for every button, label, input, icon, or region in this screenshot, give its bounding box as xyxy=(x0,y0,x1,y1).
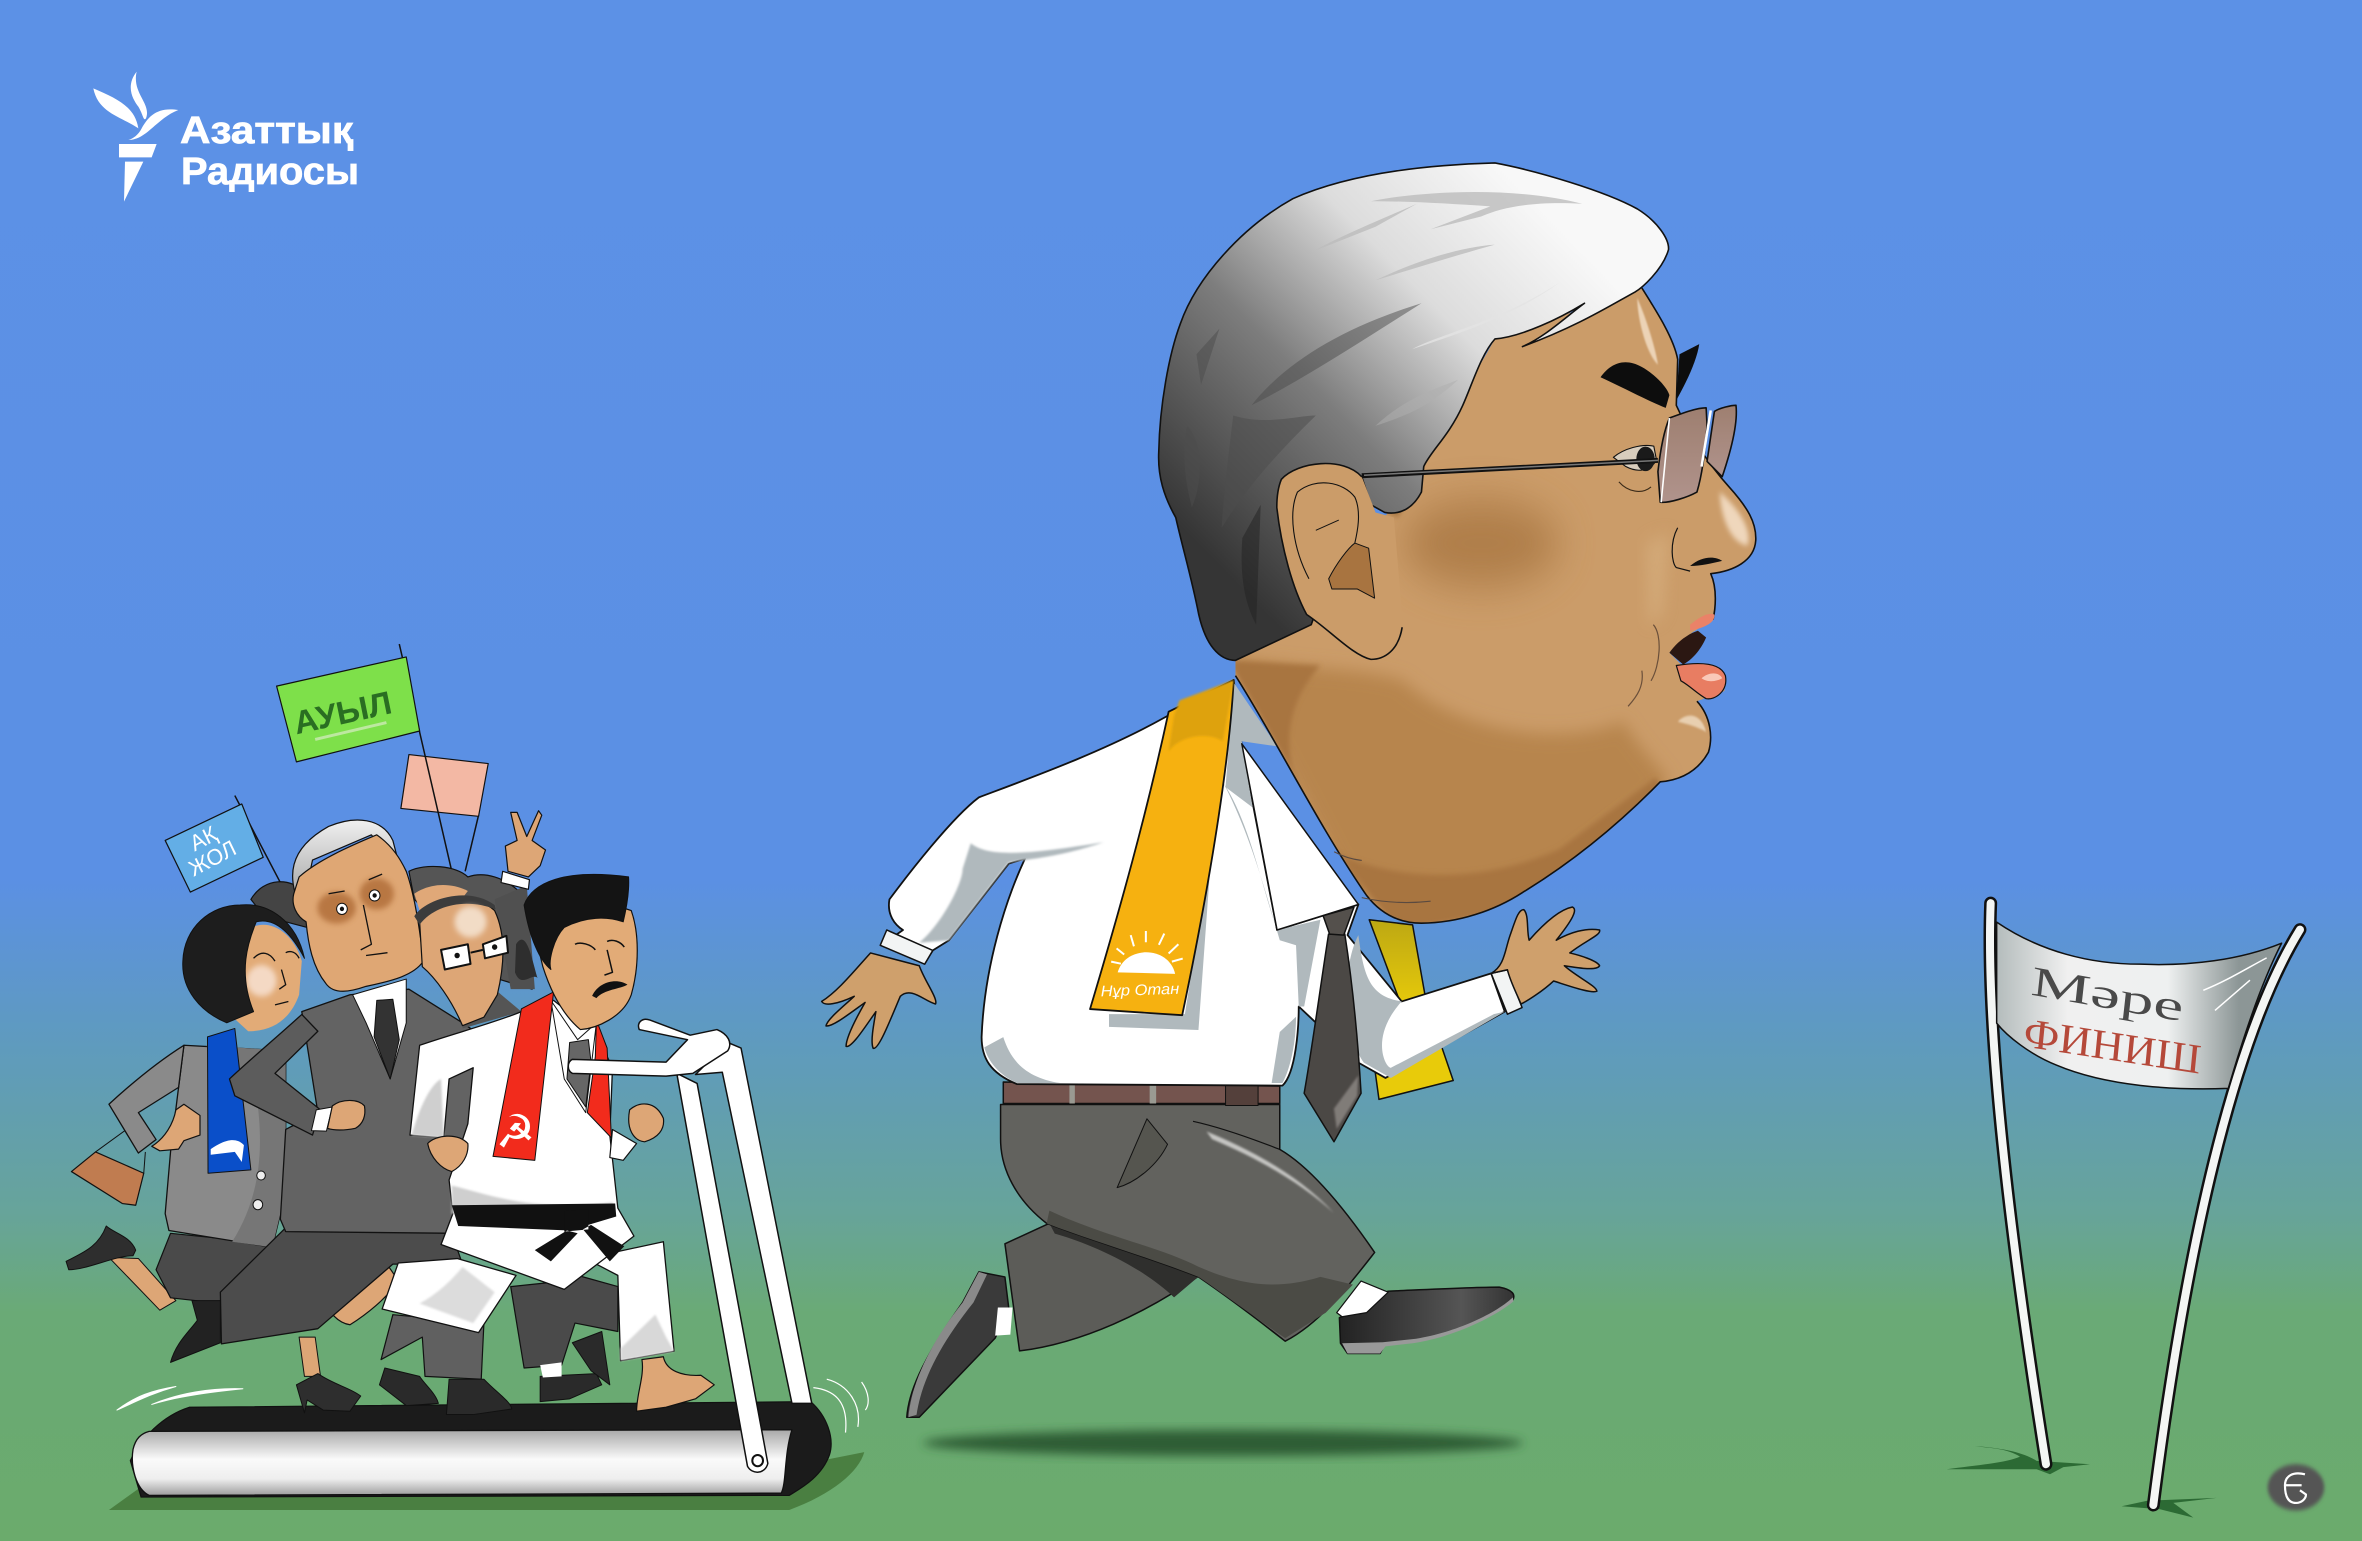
gi trousers xyxy=(586,1242,674,1361)
glasses xyxy=(1362,405,1736,502)
signature badge xyxy=(2268,1464,2324,1511)
white shirt xyxy=(881,680,1505,1086)
hair xyxy=(293,820,401,911)
trousers xyxy=(1001,1104,1375,1351)
woman's eyes xyxy=(254,952,299,1005)
jacket xyxy=(280,989,479,1233)
rear upright xyxy=(696,1042,812,1403)
sleeve xyxy=(229,1014,321,1135)
banner text top: Мәре xyxy=(2029,958,2186,1031)
blue scarf xyxy=(207,1028,251,1173)
back trouser leg xyxy=(1005,1223,1201,1351)
black belt xyxy=(452,1204,616,1230)
flag: Auyl: АУЫЛ xyxy=(291,684,395,741)
woman's skirt xyxy=(156,1233,280,1303)
hammer and sickle: ☭ xyxy=(496,1104,535,1159)
grass tufts xyxy=(1947,1446,2217,1518)
left pole xyxy=(1990,903,2046,1464)
flag: pink xyxy=(401,755,488,871)
jacket buttons xyxy=(257,1171,265,1180)
treadmill ground shadow xyxy=(109,1452,864,1510)
front upright xyxy=(677,1073,768,1472)
group of rival runners on a treadmill xyxy=(66,644,868,1510)
woman's legs and shoes xyxy=(109,1257,176,1310)
nostril xyxy=(1690,558,1722,566)
ground shadow under main runner xyxy=(923,1430,1523,1456)
main runner body xyxy=(822,680,1600,1417)
hair xyxy=(1159,163,1669,660)
woman in blue scarf xyxy=(66,905,361,1413)
treadmill motion lines xyxy=(117,1379,868,1433)
bare foot xyxy=(637,1357,714,1411)
handle xyxy=(568,1019,730,1076)
grey-haired man in suit xyxy=(171,820,618,1415)
flag: Ak Zhol xyxy=(165,796,280,892)
shirt and tie xyxy=(353,979,406,1079)
ear xyxy=(1277,464,1403,659)
tie xyxy=(1304,907,1361,1142)
bald middle man bare foot xyxy=(328,1250,398,1325)
back end of yellow sash xyxy=(1369,920,1453,1099)
dress shoes xyxy=(171,1301,220,1362)
main runner head xyxy=(1159,163,1756,931)
running belt xyxy=(130,1402,831,1497)
front shoe xyxy=(1339,1287,1514,1353)
banner text bottom: ФИНИШ xyxy=(2022,1010,2203,1084)
head xyxy=(515,940,537,980)
orange sash xyxy=(1090,680,1234,1015)
woman's jacket xyxy=(165,1045,286,1247)
woman's head xyxy=(227,925,302,1031)
shirt cuffs xyxy=(880,930,933,964)
man in karate gi xyxy=(382,874,714,1411)
woman's arm xyxy=(109,1045,184,1153)
his trousers and legs xyxy=(220,1228,462,1344)
hair xyxy=(524,874,629,970)
right pole xyxy=(2153,930,2300,1505)
treadmill base xyxy=(130,1402,831,1497)
flag: Auyl xyxy=(277,644,452,871)
flag: Ak Zhol: АҚ xyxy=(186,821,221,856)
eyebrow xyxy=(1601,344,1699,408)
logo text: Радиосы xyxy=(181,151,359,193)
treadmill uprights and handle xyxy=(568,1019,812,1472)
eye xyxy=(1613,445,1657,491)
woman's hand xyxy=(152,1104,200,1151)
handbag xyxy=(71,1152,144,1205)
belt xyxy=(1003,1082,1280,1106)
raised hand with victory sign xyxy=(495,811,546,989)
neck and small tie xyxy=(551,1000,596,1113)
front trouser leg xyxy=(1001,1104,1375,1341)
left hand xyxy=(822,953,936,1048)
finish banner with poles xyxy=(1947,903,2324,1518)
banner cloth xyxy=(1997,922,2282,1089)
hair strand tone xyxy=(1311,192,1582,349)
sleeve right xyxy=(610,1129,637,1160)
logo text: Азаттық xyxy=(180,110,354,152)
party name: Нұр Отан xyxy=(1100,981,1180,1000)
mouth and tongue xyxy=(1628,614,1726,706)
chin creases xyxy=(1334,852,1431,903)
gi jacket xyxy=(410,1000,634,1289)
face xyxy=(293,835,423,991)
back shoe xyxy=(907,1272,1009,1417)
flag: Ak Zhol: ЖОЛ xyxy=(185,835,240,881)
fists xyxy=(428,1136,468,1172)
eyes xyxy=(337,903,347,915)
face xyxy=(1229,288,1756,931)
icon: torch xyxy=(93,72,178,202)
party logo: sun xyxy=(1111,931,1183,974)
logo: Azattyq Radiosy xyxy=(93,72,359,202)
back heads xyxy=(251,866,532,989)
silver deck xyxy=(132,1430,792,1495)
shirt shading xyxy=(919,683,1505,1083)
collar xyxy=(1242,744,1358,930)
red scarf xyxy=(493,992,554,1160)
right hand xyxy=(1491,907,1600,1004)
moustache and features xyxy=(592,981,627,998)
man with glasses xyxy=(414,895,521,1028)
